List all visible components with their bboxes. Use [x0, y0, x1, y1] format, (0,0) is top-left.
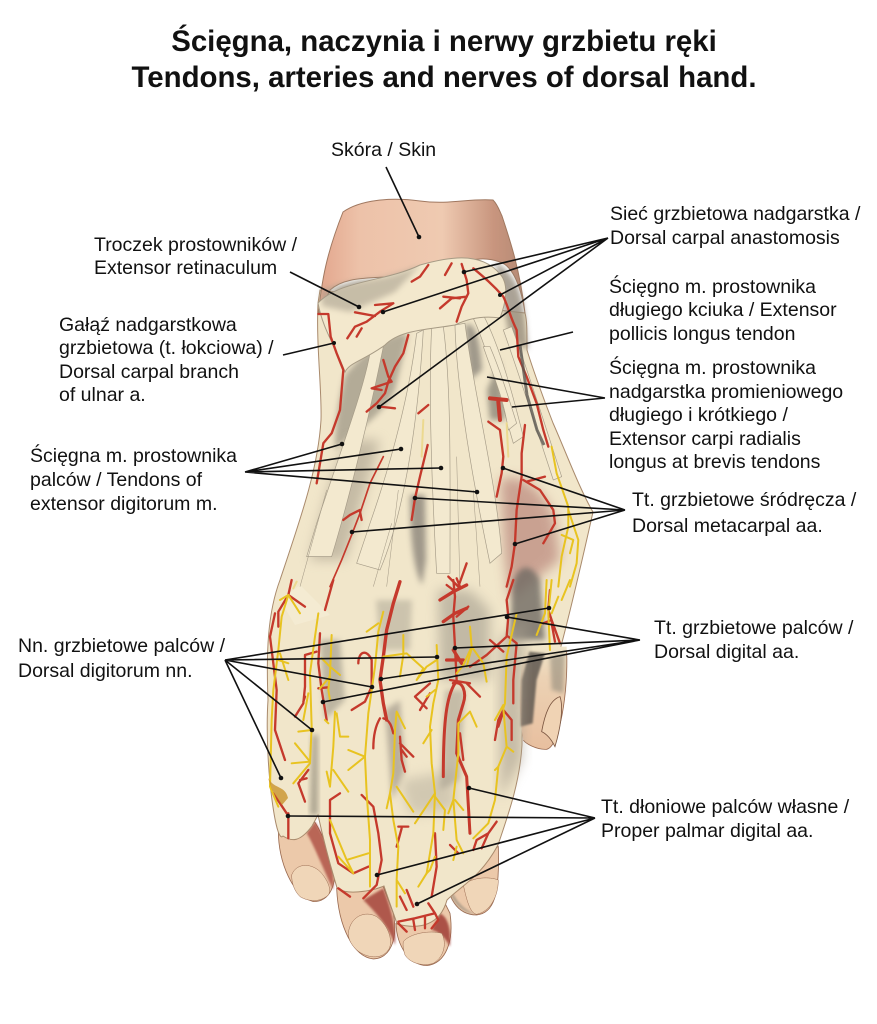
label: dorsal carpal branch: grzbietowa (t. łokciowa) /: [59, 337, 274, 359]
label: dorsal metacarpal arteries: [632, 489, 857, 537]
label: extensor pollicis longus: długiego kciuka / Extensor: [609, 299, 837, 321]
leader lines: [225, 167, 640, 904]
shading: grey and mauve washes: [280, 262, 560, 815]
fingertips and nails: [278, 820, 499, 966]
label: extensor digitorum tendons: extensor digitorum m.: [30, 493, 218, 515]
label: extensor carpi radialis: długiego i krótkiego /: [609, 404, 788, 426]
arteries: [317, 263, 555, 587]
label: dorsal carpal branch: Gałąź nadgarstkowa: [59, 314, 237, 336]
label: dorsal digital nerves: [18, 635, 226, 682]
leader: extensor carpi radialis: [487, 377, 605, 407]
extensor retinaculum band: [318, 258, 506, 372]
label: proper palmar digital arteries: Tt. dłoniowe palców własne /: [601, 796, 850, 818]
title: Ścięgna, naczynia i nerwy grzbietu ręki: [171, 24, 717, 58]
extensor tendons: [300, 315, 562, 587]
leader: extensor pollicis longus: [500, 332, 573, 350]
label: extensor digitorum tendons: palców / Tendons of: [30, 469, 203, 491]
label: extensor retinaculum: Extensor retinaculum: [94, 257, 277, 279]
label: dorsal carpal branch: [59, 314, 274, 406]
label: extensor carpi radialis: Ścięgna m. prostownika: [609, 355, 816, 379]
label: dorsal metacarpal arteries: Dorsal metacarpal aa.: [632, 515, 823, 537]
label: dorsal carpal branch: of ulnar a.: [59, 384, 146, 406]
hand illustration: [267, 199, 593, 966]
leader: proper palmar digital arteries: [288, 788, 595, 904]
label: dorsal digital nerves: Dorsal digitorum nn.: [18, 660, 192, 682]
label: dorsal digital arteries: Tt. grzbietowe palców /: [654, 617, 854, 639]
label: extensor carpi radialis: longus at brevis tendons: [609, 451, 821, 473]
label: dorsal digital arteries: Dorsal digital aa.: [654, 641, 799, 663]
label: proper palmar digital arteries: [601, 796, 850, 842]
dorsal hand base: [267, 290, 593, 926]
label: skin: Skóra / Skin: [331, 139, 436, 161]
leader end dots: [279, 235, 551, 906]
label: dorsal carpal anastomosis: Dorsal carpal anastomosis: [610, 227, 840, 249]
nerves: [270, 580, 570, 907]
label: dorsal carpal anastomosis: Sieć grzbietowa nadgarstka /: [610, 203, 861, 225]
leader: dorsal digital nerves: [225, 608, 549, 778]
label: proper palmar digital arteries: Proper palmar digital aa.: [601, 820, 813, 842]
leader: dorsal metacarpal arteries: [352, 468, 625, 544]
leader: skin: [386, 167, 419, 237]
leader: extensor retinaculum: [290, 272, 359, 307]
label: extensor pollicis longus: pollicis longus tendon: [609, 323, 795, 345]
title: [132, 24, 756, 94]
label: dorsal digital arteries: [654, 617, 854, 663]
skin cuff: [318, 199, 525, 315]
label: dorsal metacarpal arteries: Tt. grzbietowe śródręcza /: [632, 489, 857, 511]
label: dorsal carpal branch: Dorsal carpal branch: [59, 361, 239, 383]
leader: dorsal carpal branch: [283, 343, 334, 355]
label: extensor carpi radialis: nadgarstka promieniowego: [609, 381, 843, 403]
label: extensor pollicis longus: [609, 274, 837, 345]
label: extensor pollicis longus: Ścięgno m. prostownika: [609, 274, 816, 298]
label: dorsal digital nerves: Nn. grzbietowe palców /: [18, 635, 226, 657]
label: extensor retinaculum: Troczek prostowników /: [94, 234, 298, 256]
leader: dorsal digital arteries: [323, 617, 640, 702]
leader: extensor digitorum tendons: [245, 444, 477, 492]
label: extensor digitorum tendons: [30, 443, 237, 515]
label: dorsal carpal anastomosis: [610, 203, 861, 249]
label: extensor retinaculum: [94, 234, 298, 279]
label: extensor carpi radialis: Extensor carpi radialis: [609, 428, 801, 450]
label: extensor digitorum tendons: Ścięgna m. prostownika: [30, 443, 237, 467]
thumb: [520, 647, 567, 749]
leader: dorsal carpal anastomosis: [379, 238, 608, 407]
title: Tendons, arteries and nerves of dorsal hand.: [132, 61, 756, 94]
label: extensor carpi radialis: [609, 355, 843, 473]
